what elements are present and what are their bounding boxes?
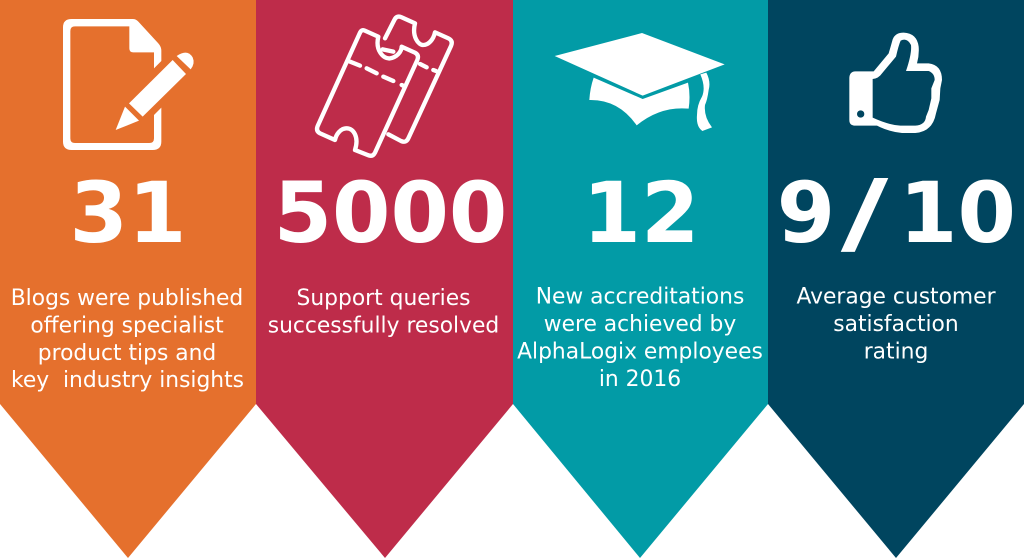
text: blogs description: key industry insights	[11, 368, 244, 393]
panel: accreditations	[513, 0, 768, 558]
text: blogs description: product tips and	[38, 341, 216, 366]
panel: support queries	[256, 0, 513, 558]
text: support description: successfully resolved	[268, 314, 499, 338]
number: 31: 31	[70, 164, 186, 262]
icon: graduation cap	[555, 33, 725, 131]
text: satisfaction description: Average customer	[796, 284, 996, 310]
text: satisfaction description	[796, 284, 996, 364]
number: 9/10: 9	[777, 164, 835, 262]
text: blogs description: offering specialist	[30, 314, 224, 338]
icon: thumbs up	[849, 33, 942, 133]
number: 12: 12	[583, 164, 699, 262]
panel: blogs	[0, 0, 256, 558]
text: support description	[268, 286, 499, 338]
icon: document and pencil	[63, 19, 194, 150]
number: 9/10: /	[841, 161, 888, 265]
panel: satisfaction	[768, 0, 1024, 558]
number: 9/10	[777, 161, 1016, 265]
text: accreditations description: AlphaLogix employees	[517, 340, 763, 364]
number: 9/10: 10	[899, 164, 1016, 262]
text: satisfaction description: satisfaction	[833, 312, 959, 337]
text: accreditations description: New accreditations	[536, 284, 744, 310]
text: satisfaction description: rating	[864, 340, 928, 364]
text: support description: Support queries	[297, 286, 470, 311]
text: accreditations description: in 2016	[599, 367, 681, 392]
text: accreditations description	[517, 284, 763, 392]
text: blogs description: Blogs were published	[11, 286, 243, 311]
text: accreditations description: were achieved by	[544, 312, 736, 337]
text: blogs description	[11, 286, 244, 393]
icon: tickets	[317, 17, 452, 156]
number: 5000: 5000	[274, 164, 507, 262]
